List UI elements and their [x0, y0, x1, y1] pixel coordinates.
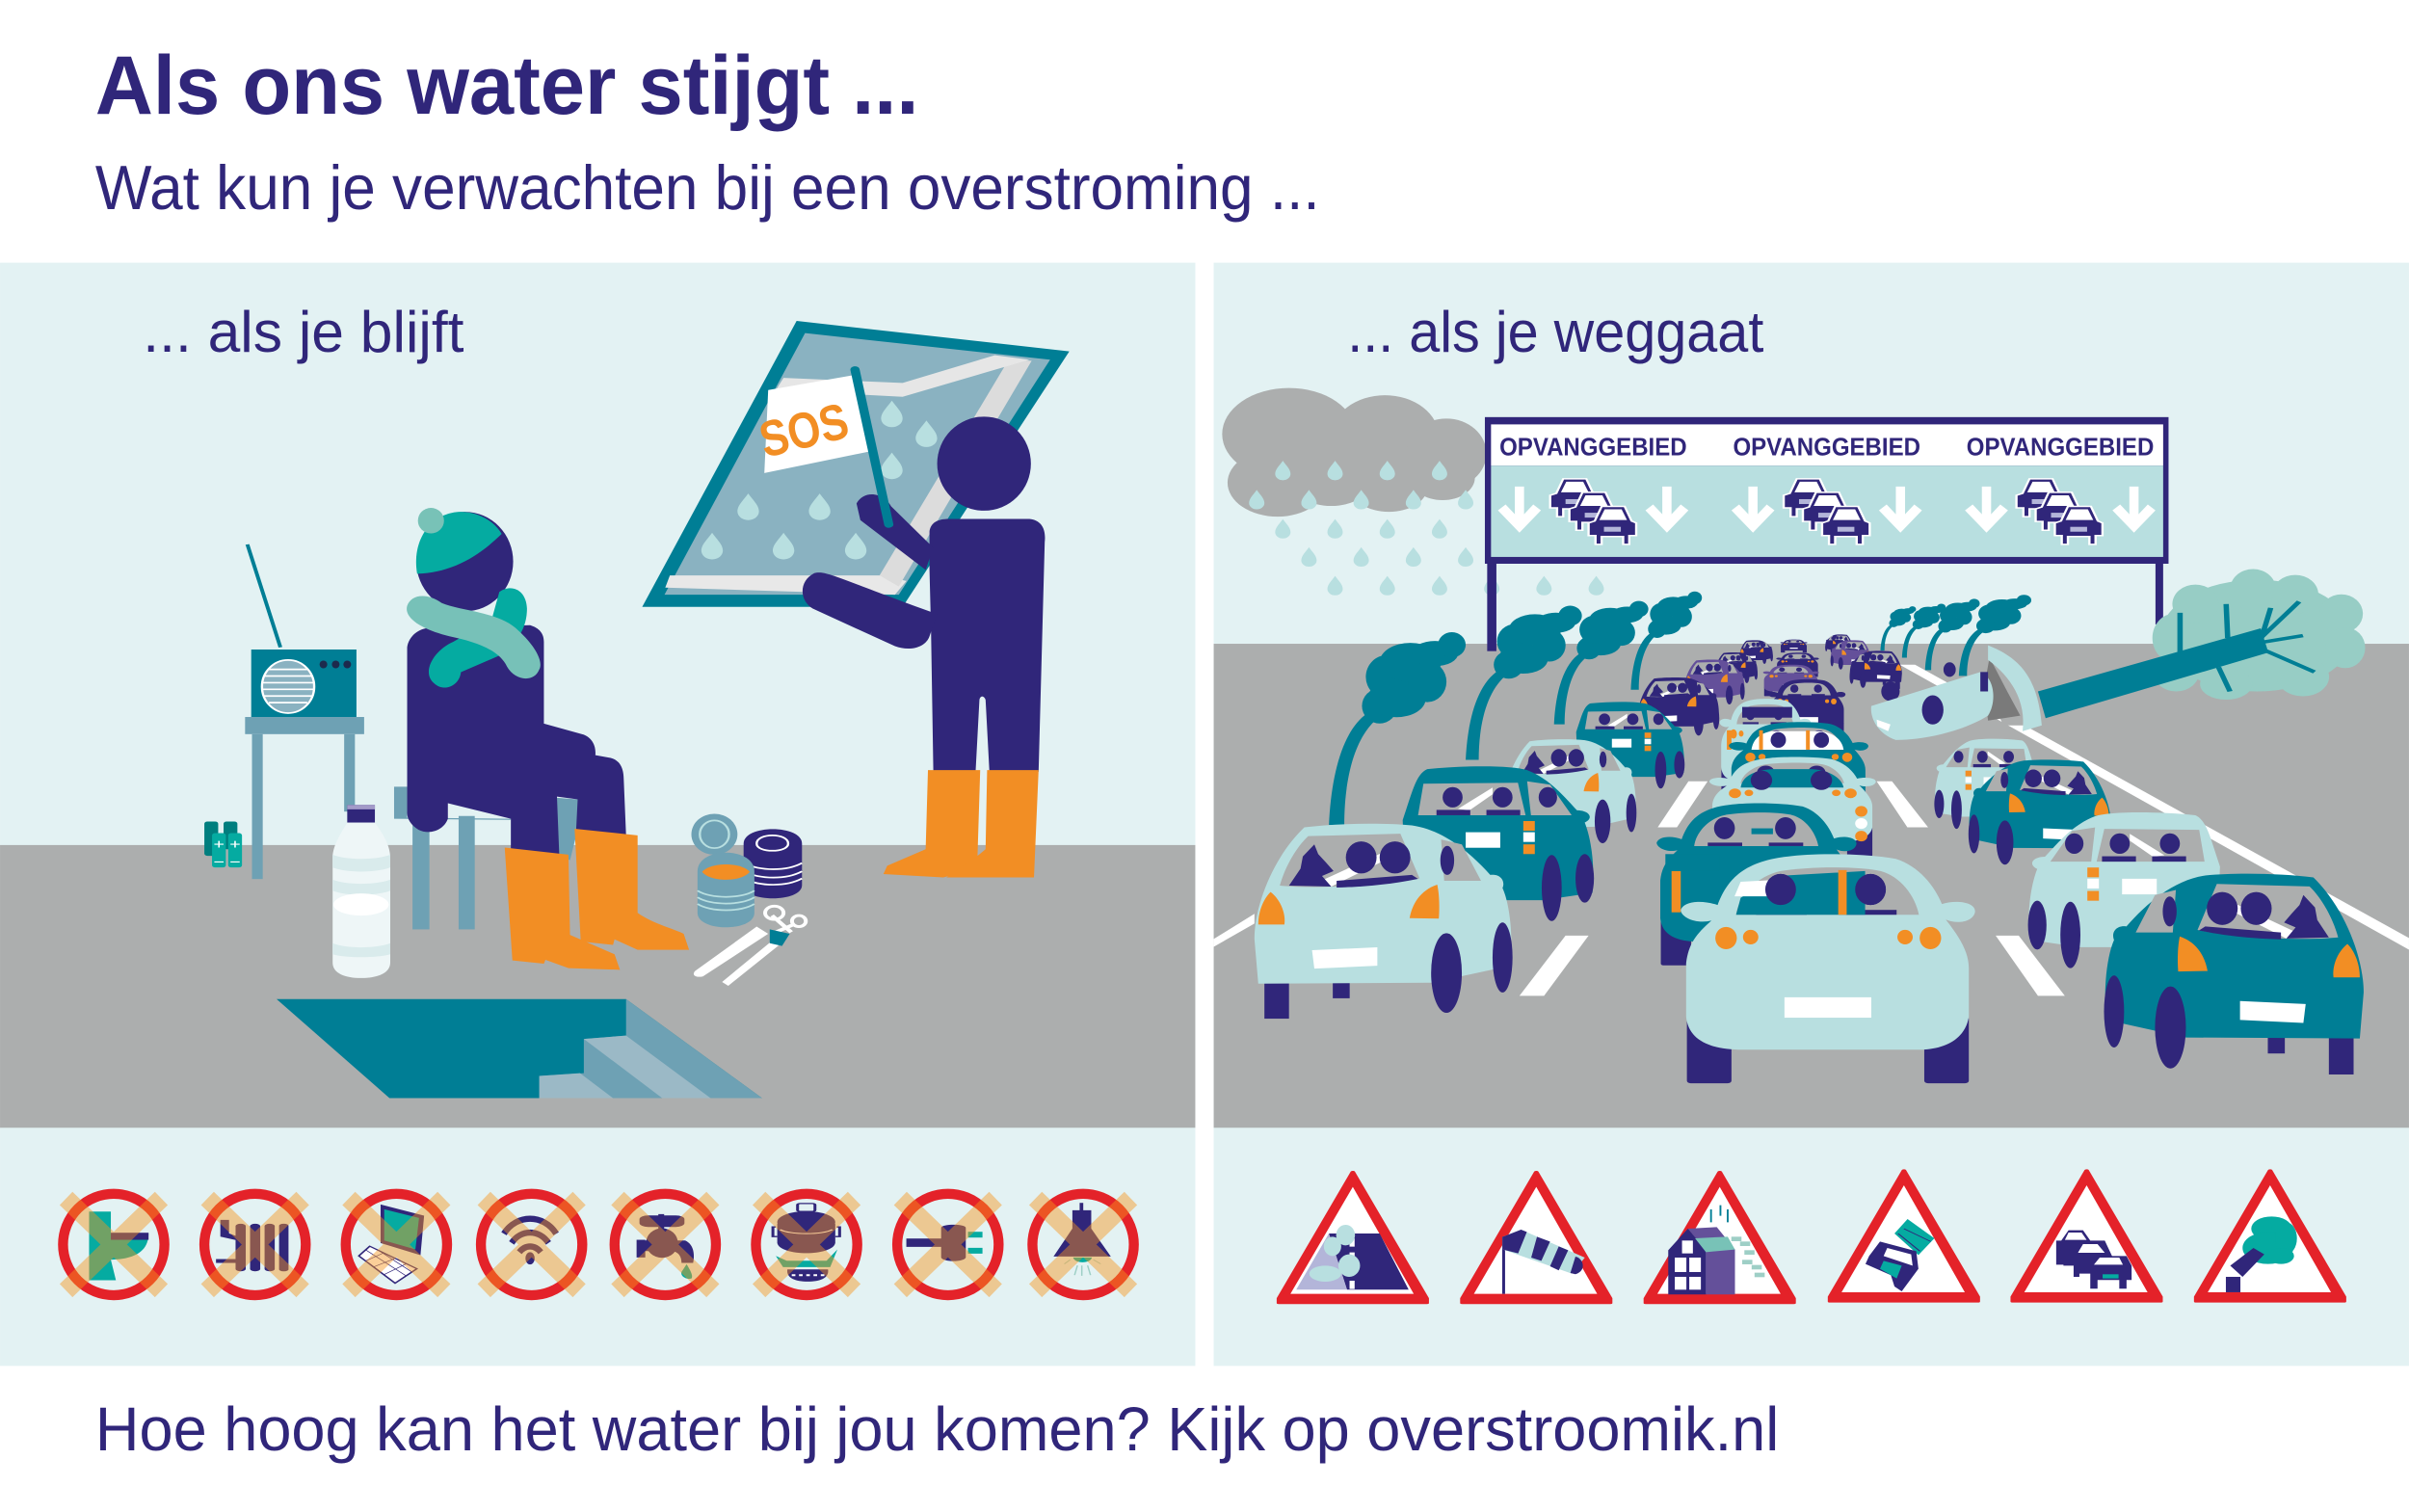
warning: overturned car	[1830, 1170, 1978, 1302]
row of no-utility icons	[63, 1194, 1134, 1295]
sign label 3: OPVANGGEBIED	[1967, 433, 2154, 462]
receding cars right lane	[1825, 634, 1902, 689]
warning: fallen tree	[2196, 1170, 2344, 1302]
standing person	[803, 416, 1045, 772]
cellar hatch with stairs	[277, 999, 762, 1098]
can opener	[694, 906, 806, 986]
panel: als je blijft	[0, 263, 1195, 1366]
road markings	[1214, 665, 2409, 995]
warning: storm windsock	[1463, 1172, 1610, 1303]
title: Als ons water stijgt ...	[95, 40, 918, 132]
wool hat	[416, 508, 502, 573]
panel: als je weggaat	[1214, 263, 2409, 1366]
icon: radiator	[216, 1220, 288, 1271]
far right lane cars	[1934, 739, 2364, 1074]
overhead sign gantry	[1485, 417, 2168, 651]
receding cars centre lane	[1763, 640, 1845, 740]
footer call to action: Hoe hoog kan het water bij jou komen? Kijk op overstroomik.nl	[95, 1394, 1779, 1464]
fallen tree	[2038, 570, 2366, 718]
overturned car	[1871, 646, 2042, 740]
centre lane cars	[1656, 699, 1975, 1083]
window with rain drops	[642, 321, 1070, 607]
standing person boots	[884, 770, 1039, 877]
icon: tap	[637, 1214, 694, 1279]
SOS flag	[764, 370, 888, 524]
icon: pot on burner	[773, 1204, 839, 1282]
traffic scene	[1214, 388, 2409, 1083]
sign label 2: OPVANGGEBIED	[1733, 433, 1920, 462]
icon: toilet	[89, 1211, 148, 1281]
prohibition rings and crosses	[63, 1194, 1134, 1295]
batteries	[204, 821, 242, 867]
windblown trees	[1329, 592, 2031, 825]
left lane cars	[1255, 702, 1684, 1019]
water bottle	[332, 805, 390, 978]
seated person	[408, 512, 626, 855]
seated person boots	[505, 829, 689, 969]
heading: als je weggaat: ... als je weggaat	[1347, 299, 1763, 364]
stool	[394, 786, 578, 929]
heading: als je blijft: ... als je blijft	[143, 299, 464, 364]
food tins	[691, 813, 802, 927]
icon symbols: toilet, radiator, computer, tap, pot, plug, lamp	[89, 1203, 1111, 1284]
warning: damaged house	[1646, 1172, 1793, 1303]
panel background	[0, 263, 1195, 1366]
warning: flooding	[1279, 1172, 1427, 1303]
scene: staying at home	[204, 321, 1070, 1098]
sign label 1: OPVANGGEBIED	[1499, 433, 1687, 462]
icon: wifi	[504, 1219, 556, 1263]
road	[1214, 644, 2409, 1127]
radio on table	[245, 544, 364, 879]
icon: ceiling lamp	[1053, 1203, 1111, 1276]
panel background	[1214, 263, 2409, 1366]
warning: traffic jam	[2013, 1170, 2160, 1302]
row of warning triangles	[1279, 1170, 2344, 1303]
subtitle: Wat kun je verwachten bij een overstroming ...	[95, 152, 1320, 223]
floor	[0, 845, 1195, 1127]
scarf	[407, 588, 541, 688]
icon: power plug	[907, 1225, 983, 1261]
receding cars left lane	[1638, 640, 1773, 737]
view through front car window	[1734, 870, 1886, 915]
icon: computer	[358, 1205, 424, 1284]
rain cloud	[1222, 388, 1604, 596]
SOS text: SOS	[754, 392, 854, 469]
